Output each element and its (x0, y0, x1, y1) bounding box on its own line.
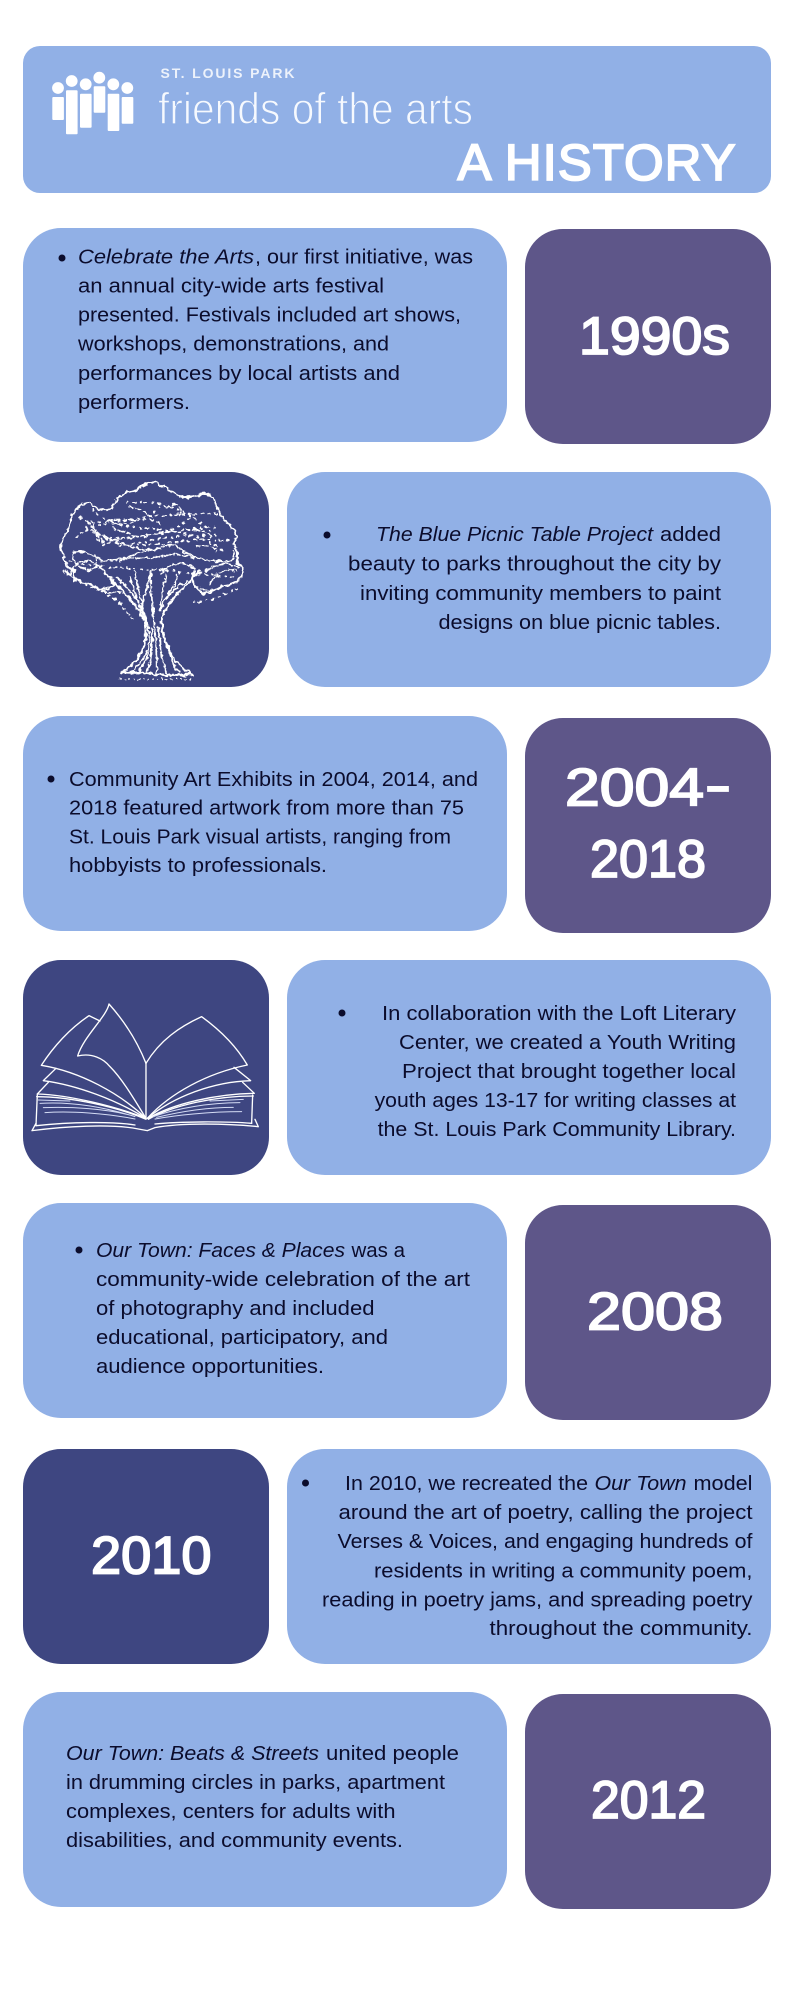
bullet (48, 776, 54, 782)
panel: 2012 year: 2012 (591, 1771, 706, 1830)
text block: community art exhibits: hobbyists to professionals. (69, 854, 327, 877)
text block: Celebrate the Arts: workshops, demonstrations, and (77, 332, 389, 356)
text block: Our Town Faces & Places: Our Town: Faces & Places (96, 1239, 345, 1262)
text block: Verses & Voices: In 2010, we recreated the (345, 1472, 588, 1495)
icon: tree (61, 483, 242, 679)
text block: Our Town Beats & Streets: Our Town: Beats & Streets (66, 1742, 319, 1765)
icon: friends of the arts logo (52, 72, 133, 134)
text block: Celebrate the Arts: Celebrate the Arts (78, 246, 254, 268)
text block: Our Town Faces & Places: was a (351, 1239, 406, 1262)
text block: Verses & Voices: around the art of poetry, calling the project (338, 1501, 753, 1524)
text block: Blue Picnic Table Project: beauty to parks throughout the city by (348, 552, 722, 576)
text block: Celebrate the Arts: , our first initiative, was (255, 246, 473, 268)
text block: Our Town Faces & Places (96, 1239, 470, 1378)
panel: Beats & Streets text (23, 1692, 507, 1907)
panel: Faces & Places text (23, 1203, 507, 1418)
logo text: friends of the arts: friends of the arts (158, 85, 473, 134)
panel: Verses & Voices text (287, 1449, 771, 1664)
text block: Verses & Voices (322, 1472, 753, 1640)
text block: Blue Picnic Table Project: added (660, 523, 721, 546)
text block: Verses & Voices: throughout the community. (490, 1617, 752, 1640)
header panel (23, 46, 771, 193)
text block: Celebrate the Arts (77, 246, 473, 414)
text block: Verses & Voices: residents in writing a community poem, (374, 1560, 752, 1582)
panel: community art exhibits text (23, 716, 507, 931)
panel: 2012 year (525, 1694, 771, 1909)
title: A HISTORY (458, 134, 736, 191)
panel: 2010 year: 2010 (91, 1526, 212, 1586)
panel: book image (23, 960, 269, 1175)
panel: 2004-2018 year: 2018 (590, 830, 706, 889)
text block: Youth Writing Project: the St. Louis Park Community Library. (378, 1118, 736, 1141)
text block: Our Town Beats & Streets: united people (326, 1742, 459, 1765)
panel: tree image (23, 472, 269, 687)
panel: 2004-2018 year: 2004 (565, 758, 704, 818)
panel: Blue Picnic Table text (287, 472, 771, 687)
text block: community art exhibits: 2018 featured artwork from more than 75 (69, 796, 464, 820)
panel: 2004-2018 year (525, 718, 771, 933)
text block: Our Town Faces & Places: audience opportunities. (96, 1355, 324, 1378)
panel: 2010 year (23, 1449, 269, 1664)
bullet (338, 1010, 346, 1016)
text block: Verses & Voices: reading in poetry jams, and spreading poetry (322, 1588, 753, 1612)
panel: 2008 year: 2008 (587, 1282, 723, 1342)
text block: Blue Picnic Table Project: designs on blue picnic tables. (438, 611, 721, 634)
text block: Verses & Voices: Our Town (594, 1472, 686, 1495)
bullet (58, 254, 66, 262)
text block: Youth Writing Project: In collaboration with the Loft Literary (382, 1002, 737, 1025)
bullet (302, 1480, 309, 1486)
text block: Youth Writing Project: youth ages 13-17 for writing classes at (375, 1089, 736, 1112)
text block: community art exhibits (69, 768, 478, 877)
text block: Celebrate the Arts: performers. (78, 391, 190, 414)
text block: Our Town Faces & Places: of photography and included (96, 1297, 374, 1320)
bullet (324, 532, 330, 538)
text block: Verses & Voices: Verses & Voices, and engaging hundreds of (338, 1530, 753, 1553)
panel: 1990s year (525, 229, 771, 444)
text block: Our Town Faces & Places: community-wide celebration of the art (96, 1268, 470, 1291)
text block: Our Town Beats & Streets (66, 1742, 459, 1852)
text block: Our Town Beats & Streets: complexes, centers for adults with (66, 1800, 396, 1823)
text block: Celebrate the Arts: performances by local artists and (78, 362, 400, 385)
text block: Blue Picnic Table Project: The Blue Picnic Table Project (376, 523, 654, 546)
text block: Blue Picnic Table Project (348, 523, 722, 634)
text block: community art exhibits: Community Art Exhibits in 2004, 2014, and (69, 768, 478, 791)
text block: Our Town Faces & Places: educational, participatory, and (96, 1326, 388, 1349)
text block: Youth Writing Project (375, 1002, 737, 1141)
text block: Celebrate the Arts: presented. Festivals included art shows, (78, 304, 461, 326)
logo text: St. Louis Park: ST. LOUIS PARK (160, 65, 294, 81)
panel: 1990s year: 1990s (579, 307, 730, 366)
text block: Our Town Beats & Streets: disabilities, and community events. (66, 1829, 403, 1852)
icon: open book (32, 1004, 258, 1131)
panel: 2008 year (525, 1205, 771, 1420)
text block: community art exhibits: St. Louis Park visual artists, ranging from (69, 826, 451, 848)
text block: Blue Picnic Table Project: inviting community members to paint (360, 582, 721, 605)
text block: Our Town Beats & Streets: in drumming circles in parks, apartment (66, 1771, 445, 1794)
text block: Verses & Voices: model (694, 1472, 752, 1495)
panel: 2004-2018 year: - (705, 756, 731, 815)
text block: Youth Writing Project: Center, we created a Youth Writing (399, 1031, 736, 1054)
text block: Celebrate the Arts: an annual city-wide arts festival (78, 274, 384, 298)
bullet (76, 1246, 82, 1254)
text block: Youth Writing Project: Project that brought together local (402, 1060, 736, 1083)
panel: Loft Youth Writing text (287, 960, 771, 1175)
panel: 1990s text (23, 228, 507, 442)
